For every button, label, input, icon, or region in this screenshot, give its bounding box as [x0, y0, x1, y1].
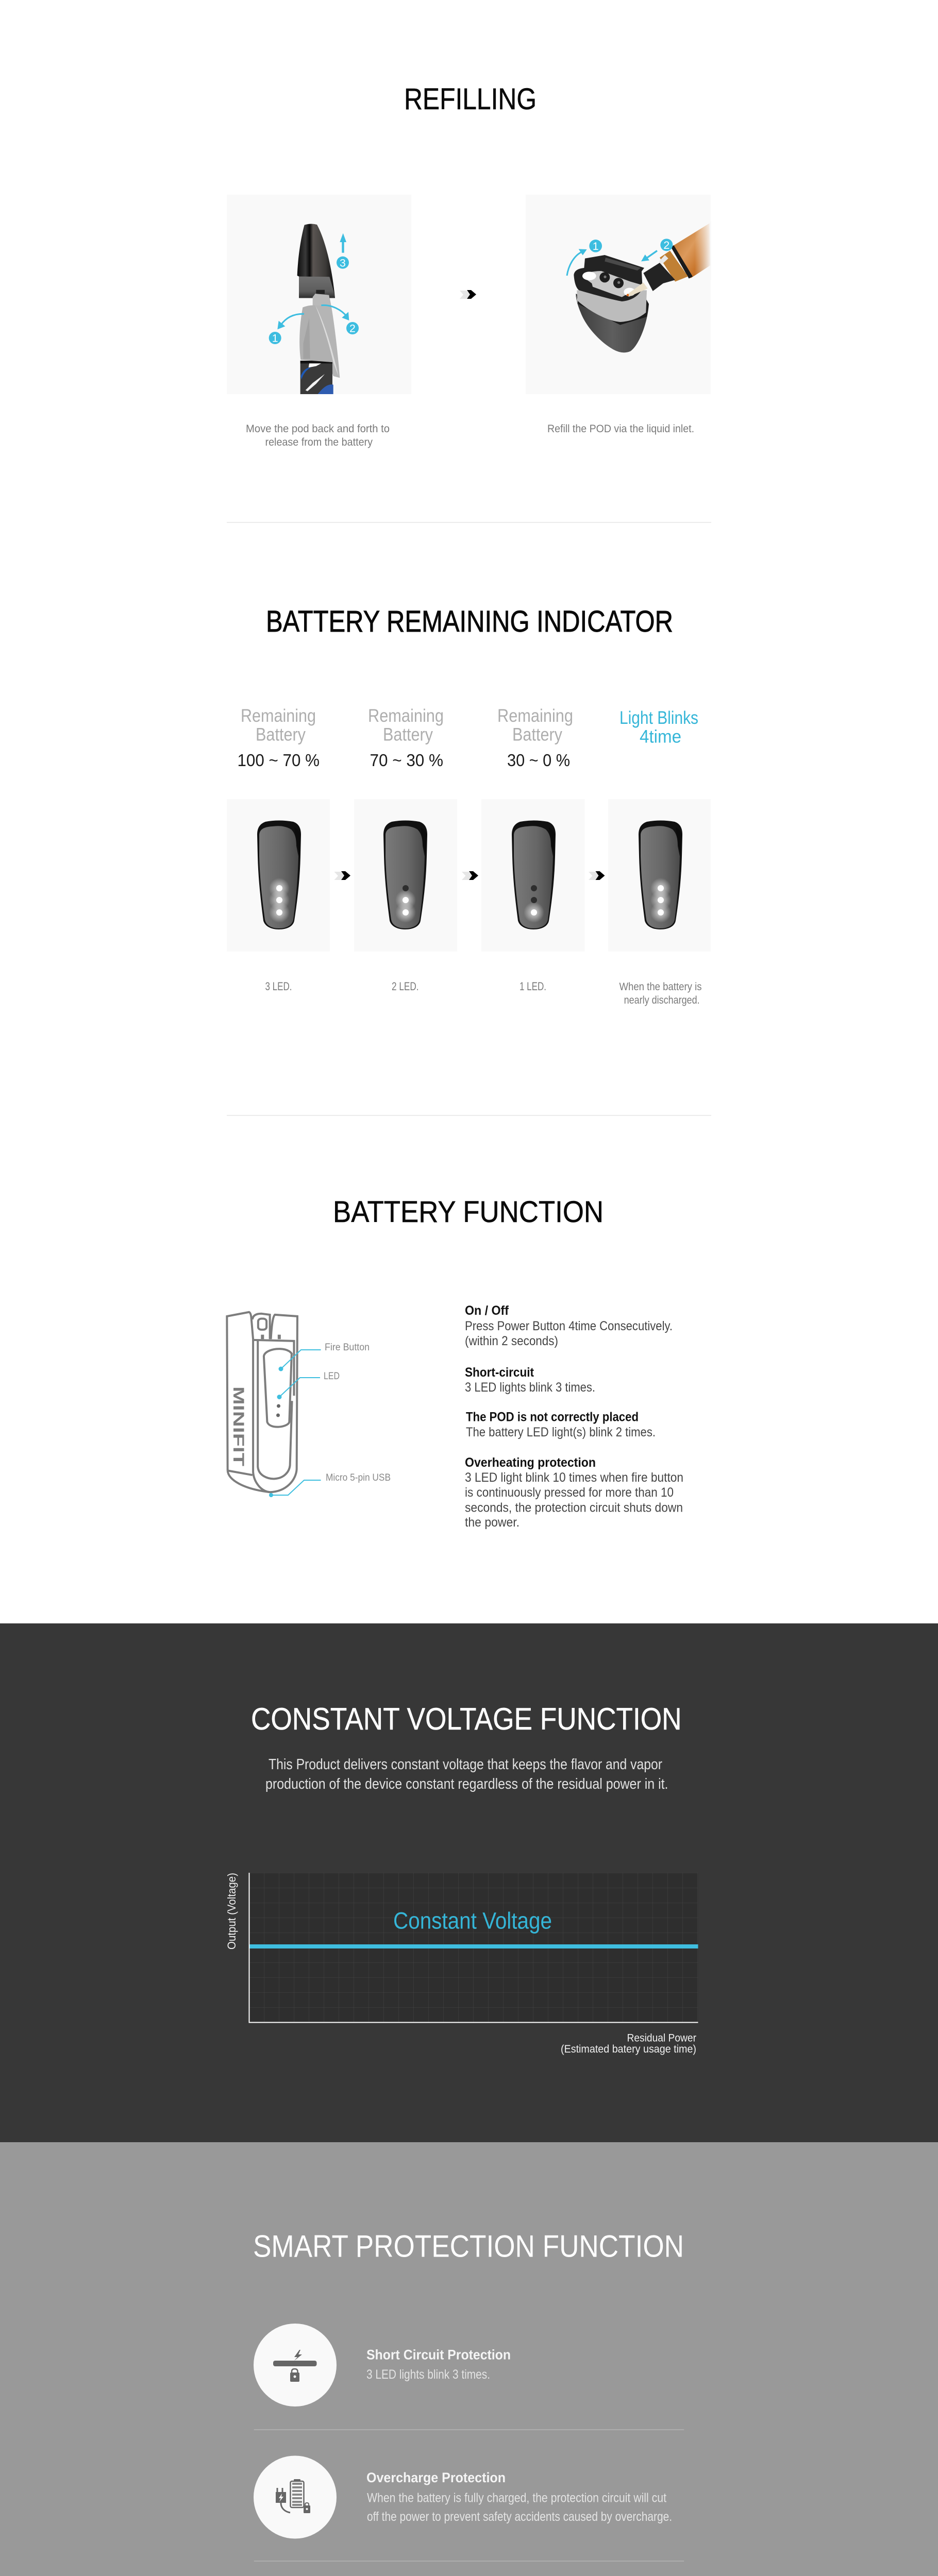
- body: [367, 2490, 672, 2524]
- x axis label: (Estimated batery usage time): [561, 2043, 696, 2055]
- description: This Product delivers constant voltage that keeps the flavor and vapor: [269, 1756, 662, 1773]
- arrow 1: [567, 251, 582, 276]
- illustration: bottle filling pod: [567, 222, 711, 352]
- device with three lit LEDs: [257, 820, 301, 929]
- callout: fire button: Fire Button: [325, 1342, 370, 1353]
- caption: nearly discharged: When the battery is: [619, 981, 702, 993]
- text block: pod not placed: [466, 1410, 656, 1439]
- column labels: 100 to 70: [237, 706, 320, 770]
- callout: micro USB: Micro 5-pin USB: [326, 1472, 391, 1483]
- caption: step one: [246, 423, 390, 448]
- column labels: 30 to 0: Remaining: [497, 706, 573, 726]
- item: short circuit: [254, 2324, 511, 2406]
- text block: overheating: [465, 1455, 683, 1530]
- text block: on off: (within 2 seconds): [465, 1334, 558, 1348]
- column labels: light blinks: [619, 708, 698, 747]
- x axis label: Residual Power: [627, 2032, 696, 2044]
- caption: step one: release from the battery: [265, 436, 373, 448]
- arrow: step three: [589, 871, 605, 880]
- callout: fire button: [278, 1342, 370, 1371]
- caption: step one: Move the pod back and forth to: [246, 423, 390, 435]
- body: When the battery is fully charged, the protection circuit will cut: [367, 2490, 666, 2505]
- description: [265, 1756, 668, 1792]
- body: off the power to prevent safety accidents caused by overcharge.: [367, 2510, 672, 2524]
- column labels: 100 to 70: 100 ~ 70 %: [237, 751, 320, 770]
- column labels: 70 to 30: Battery: [383, 724, 433, 745]
- panel: refill via inlet illustration: [526, 195, 711, 394]
- panel: two LEDs: [354, 799, 457, 952]
- column labels: 70 to 30: [368, 706, 444, 770]
- text block: on off: On / Off: [465, 1303, 509, 1318]
- heading: Short Circuit Protection: [366, 2347, 511, 2363]
- text block: overheating: Overheating protection: [465, 1455, 596, 1470]
- illustration: bottle filling pod: 1: [593, 240, 599, 252]
- chart: constant voltage: [225, 1873, 698, 2055]
- column labels: 100 to 70: Battery: [256, 724, 306, 745]
- text block: short circuit: [465, 1365, 595, 1395]
- device with blinking LEDs: [639, 820, 682, 929]
- text block: overheating: seconds, the protection circuit shuts down: [465, 1500, 683, 1515]
- y axis label: Output (Voltage): [225, 1873, 238, 1950]
- panel: one LED: [481, 799, 584, 952]
- data line: [249, 1944, 698, 1948]
- arrow 3: [340, 233, 346, 253]
- item: overcharge: [254, 2455, 672, 2539]
- illustration: bottle filling pod: 2: [663, 239, 669, 251]
- heading: Overcharge Protection: [366, 2470, 506, 2485]
- illustration: pod lifted from battery: [269, 224, 359, 394]
- column labels: 30 to 0: 30 ~ 0 %: [507, 751, 570, 770]
- panel: three LEDs: [227, 799, 330, 952]
- body: 3 LED lights blink 3 times.: [366, 2367, 490, 2382]
- logo text on device: MINIFIT: [230, 1386, 247, 1466]
- text block: pod not placed: The battery LED light(s) blink 2 times.: [466, 1425, 656, 1439]
- section: battery function: [227, 1195, 683, 1530]
- illustration: pod lifted from battery: 1: [272, 332, 278, 345]
- caption: nearly discharged: [619, 981, 702, 1006]
- text block: on off: Press Power Button 4time Consecutively.: [465, 1319, 673, 1333]
- column labels: 100 to 70: Remaining: [241, 706, 316, 726]
- caption: 3 LED: 3 LED.: [265, 980, 292, 993]
- text block: on off: [465, 1303, 673, 1348]
- description: production of the device constant regardless of the residual power in it.: [265, 1776, 668, 1792]
- arrow: refilling step: [460, 290, 476, 299]
- icon: short circuit: [273, 2350, 316, 2382]
- column labels: light blinks: Light Blinks: [619, 708, 698, 728]
- device with two lit LEDs: [383, 820, 427, 929]
- panel: pod removal illustration: [227, 195, 411, 394]
- column labels: 30 to 0: Battery: [512, 724, 562, 745]
- text block: overheating: 3 LED light blink 10 times when fire button: [465, 1470, 683, 1485]
- icon: overcharge: [276, 2479, 310, 2513]
- chart label: Constant Voltage: [393, 1908, 552, 1934]
- title: smart protection function: SMART PROTECTION FUNCTION: [253, 2229, 684, 2264]
- text block: pod not placed: The POD is not correctly placed: [466, 1410, 639, 1424]
- panel: blinking LEDs: [608, 799, 711, 952]
- section: battery remaining indicator: [227, 605, 711, 1006]
- caption: 2 LED: 2 LED.: [392, 980, 418, 993]
- arrow: step one: [334, 871, 350, 880]
- x axis label: [561, 2032, 696, 2055]
- illustration: pod lifted from battery: 3: [340, 257, 346, 269]
- caption: step two: Refill the POD via the liquid inlet.: [547, 423, 694, 435]
- text block: short circuit: Short-circuit: [465, 1365, 534, 1380]
- callout: LED: LED: [324, 1371, 340, 1382]
- section: smart protection function: [0, 2142, 938, 2576]
- caption: nearly discharged: nearly discharged.: [624, 994, 700, 1006]
- illustration: pod lifted from battery: 2: [349, 323, 356, 335]
- column labels: 70 to 30: 70 ~ 30 %: [370, 751, 443, 770]
- title: refilling: REFILLING: [404, 82, 537, 116]
- arrow 1: [281, 305, 347, 325]
- title: constant voltage function: CONSTANT VOLTAGE FUNCTION: [251, 1702, 682, 1736]
- section: refilling: [227, 82, 711, 448]
- text block: short circuit: 3 LED lights blink 3 times.: [465, 1380, 595, 1395]
- text block: overheating: the power.: [465, 1515, 520, 1530]
- text block: overheating: is continuously pressed for more than 10: [465, 1485, 674, 1500]
- section: constant voltage function: [0, 1623, 938, 2142]
- device with one lit LED: [512, 820, 556, 929]
- column labels: 30 to 0: [497, 706, 573, 770]
- column labels: light blinks: 4time: [640, 726, 681, 747]
- callout: LED: [277, 1371, 340, 1399]
- caption: 1 LED: 1 LED.: [520, 980, 546, 993]
- title: battery function: BATTERY FUNCTION: [333, 1195, 604, 1229]
- title: battery remaining indicator: BATTERY REMAINING INDICATOR: [266, 605, 673, 638]
- diagram: device outline: [227, 1312, 297, 1492]
- column labels: 70 to 30: Remaining: [368, 706, 444, 726]
- callout: micro USB: [269, 1472, 391, 1497]
- arrow: step two: [462, 871, 478, 880]
- arrow 2: [647, 251, 657, 258]
